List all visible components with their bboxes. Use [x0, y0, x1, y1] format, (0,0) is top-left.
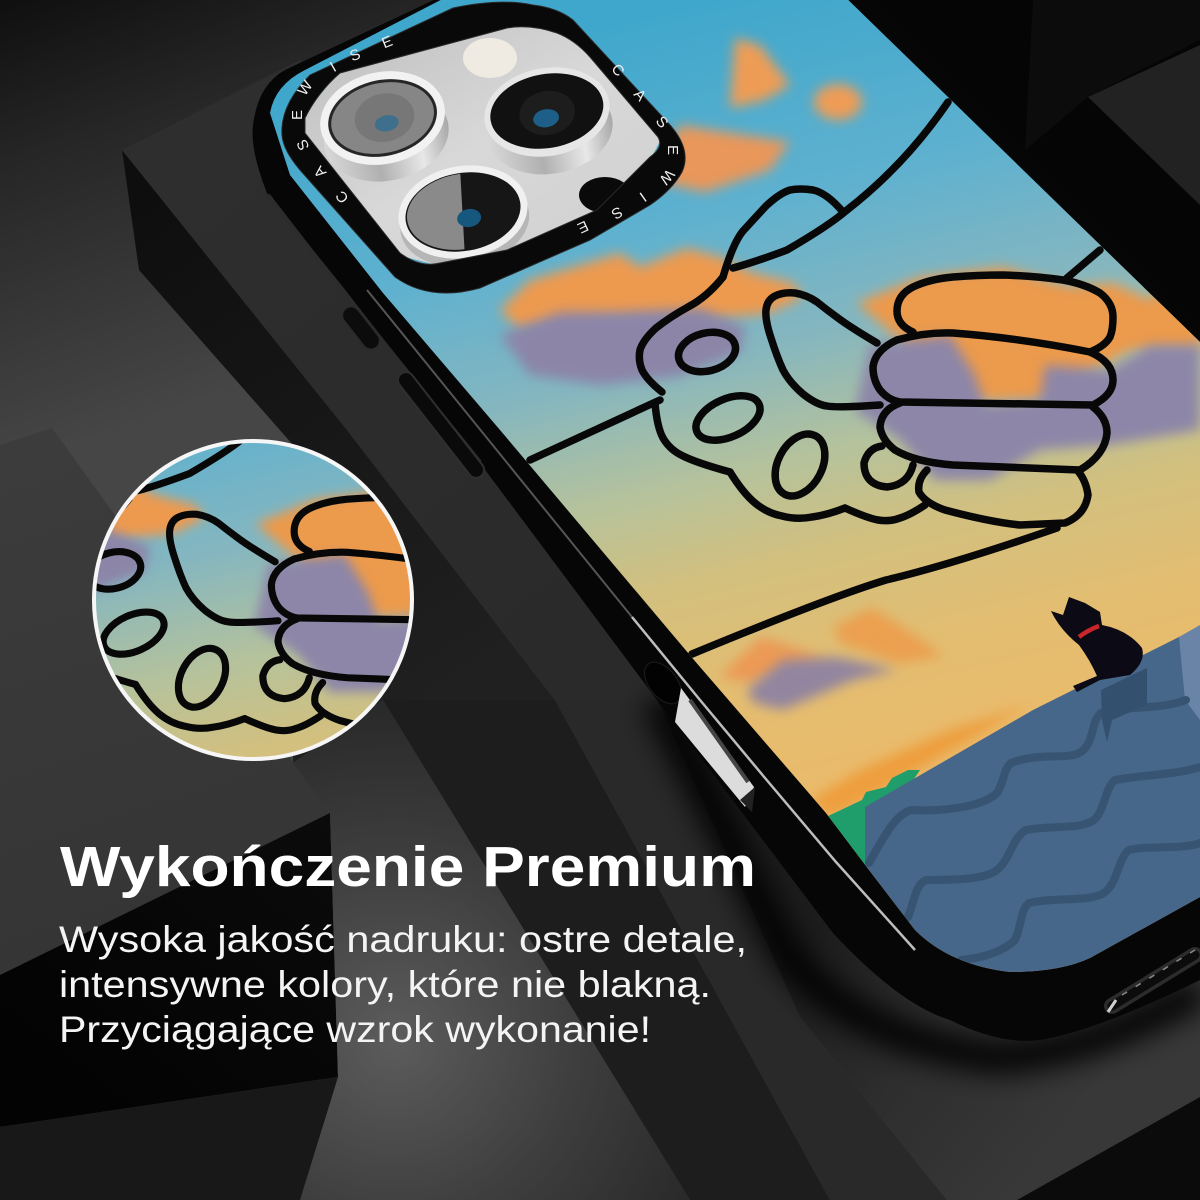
- artwork: lighter roof panel: [1179, 625, 1200, 720]
- camera island: brand text right: S: [652, 113, 671, 132]
- background: floor lower right: [657, 700, 1200, 1200]
- title: Wykończenie Premium: [60, 835, 756, 899]
- phone: glossy edge: [268, 195, 480, 462]
- phone: side port hole: [637, 655, 689, 711]
- phone: [240, 0, 1200, 1041]
- background: upper right block: [1088, 45, 1200, 205]
- camera island: brand text left: W: [294, 77, 317, 99]
- camera island: brand text right: W: [655, 166, 678, 188]
- background: upper right dark: [840, 0, 1200, 420]
- description text: Przyciągające wzrok wykonanie!: [59, 1009, 651, 1050]
- artwork panel: [240, 0, 1200, 990]
- artwork: hand line drawing: [530, 102, 1113, 654]
- camera island: brand text right: C: [608, 61, 628, 80]
- phone: highlight line: [367, 290, 632, 617]
- background: front block dark face: [0, 813, 338, 1127]
- artwork: cat shadow: [1101, 668, 1147, 742]
- background: dark stripe: [383, 700, 830, 1200]
- background: slab top face: [122, 60, 700, 700]
- camera island: brand text left: C: [332, 187, 352, 206]
- background: upper right sheen: [1025, 0, 1200, 150]
- camera island: brand text right: S: [608, 203, 625, 222]
- camera island: lens two: [477, 58, 620, 184]
- description text: intensywne kolory, które nie blakną.: [59, 964, 711, 1005]
- phone: volume button lower: [395, 369, 487, 481]
- camera island: brand text left: S: [347, 46, 363, 65]
- camera island: flash: [463, 38, 517, 78]
- camera island: brand text right: E: [664, 145, 681, 155]
- camera island: black frame: [282, 2, 685, 293]
- camera island: brand text left: E: [379, 33, 395, 52]
- background: dark corner lower right: [1017, 1097, 1200, 1200]
- camera island: glass plate: [300, 22, 662, 266]
- background: slab side band: [122, 150, 555, 763]
- camera island: brand text left: A: [311, 162, 330, 181]
- description text: [59, 919, 747, 1050]
- phone: chrome side button: [675, 688, 755, 812]
- description text: Wysoka jakość nadruku: ostre detale,: [59, 919, 747, 960]
- camera island: brand text left: E: [289, 110, 306, 120]
- background: front block top: [0, 428, 330, 975]
- artwork: clouds: [500, 38, 1200, 818]
- camera island: brand text left: I: [327, 59, 339, 76]
- phone: bottom speaker: [1108, 950, 1195, 1012]
- camera island: brand text right: I: [636, 188, 649, 205]
- phone: bright edge highlight: [632, 617, 915, 950]
- artwork: blue tiled roof: [865, 622, 1200, 985]
- magnified detail: white ring: [94, 441, 412, 759]
- artwork: green trees: [828, 770, 920, 871]
- camera island: brand text right: A: [630, 86, 649, 105]
- artwork: roof tile lines: [869, 700, 1200, 960]
- phone: outer black case: [253, 0, 1200, 1041]
- background: floor bottom left: [0, 1077, 345, 1200]
- background: light stripe: [293, 700, 690, 1200]
- camera island: brand text right: E: [575, 217, 591, 236]
- camera island: brand text left: S: [294, 137, 313, 153]
- phone: volume button upper: [339, 303, 383, 353]
- background: mid stripe: [555, 700, 947, 1200]
- camera island: sensor: [579, 177, 631, 213]
- camera island: brand text right: [575, 61, 681, 236]
- artwork: cat: [1051, 597, 1143, 692]
- phone shadow: [657, 700, 1200, 1058]
- camera island: lens three: [391, 155, 536, 276]
- camera island: brand text left: [289, 33, 395, 206]
- camera island: [282, 2, 685, 293]
- magnified detail: artwork content: [92, 439, 414, 761]
- magnified detail circle: [92, 439, 414, 761]
- artwork: sky gradient: [240, 0, 1200, 990]
- camera island: lens one: [311, 60, 457, 193]
